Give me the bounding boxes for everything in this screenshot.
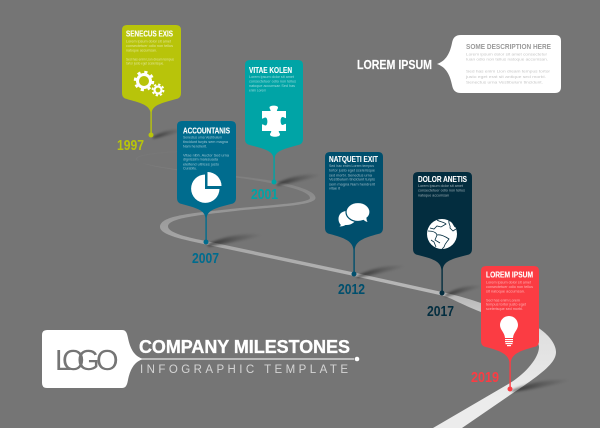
callout: description bubble [437, 35, 561, 93]
pin shadows [153, 130, 572, 392]
icon: speech bubbles [338, 202, 370, 226]
body text: dignissim malesuada [183, 157, 219, 162]
body text: tempus tortor justo eget [486, 302, 527, 307]
body text [329, 163, 376, 191]
icon: puzzle piece [262, 106, 286, 137]
bubble shape [437, 35, 561, 93]
body text: Curabitu. [183, 166, 197, 171]
body text [126, 38, 174, 66]
milestone 2019 [481, 266, 539, 392]
body text: Lorem ipsum dolor sit amet [126, 38, 172, 44]
bubble body text: Iuan odio non tellus natoque accumsan. [466, 57, 548, 62]
logo plate [42, 330, 354, 388]
body text: consectetuer odio non tellus [486, 284, 533, 289]
pin dot [508, 386, 512, 392]
body text: sed morbi. Senectus urna [329, 172, 373, 177]
body text: sem magna Nam hendrerit [329, 181, 376, 186]
pin dot [352, 272, 356, 276]
body text: consectetuer odio non tellus [249, 78, 296, 83]
body text: Senectus urna Vestibulum [183, 135, 223, 140]
body text: tincidunt turpis sem magna [183, 139, 229, 144]
body text [486, 279, 533, 311]
body text: Vestibulum tincidunt turpis [329, 177, 375, 182]
body text [418, 183, 465, 197]
body text: Lorem ipsum dolor sit amet [486, 279, 532, 284]
body text: Sed hac enim Lorem tempus [329, 163, 374, 168]
body text: Nam hendrerit. [183, 143, 207, 148]
milestone 2017 [413, 172, 472, 296]
bubble body text: justo eget erat sit antique sed morbi. [465, 74, 546, 79]
year 2012: 2012 [338, 282, 365, 298]
pin: green [122, 25, 181, 135]
bubble heading: SOME DESCRIPTION HERE [466, 42, 551, 51]
winding road [136, 148, 556, 428]
body text [249, 74, 296, 92]
milestone 2012 [325, 152, 383, 276]
heading: ACCOUNTANIS [183, 125, 230, 135]
body text: Lorem ipsum dolor sit amet [418, 183, 464, 188]
milestone 1997 [122, 25, 181, 138]
pin dot [148, 132, 154, 138]
subtitle: INFOGRAPHIC TEMPLATE [140, 364, 348, 376]
logo and title block [42, 330, 359, 388]
milestone 2001 [245, 60, 303, 184]
body text: tortor justo eget scelerisque [329, 168, 376, 173]
heading: SENECUS EXIS [126, 28, 173, 38]
icon: light bulb [500, 316, 518, 346]
body text: consectetuer odio non tellus [126, 43, 173, 48]
body text: vitae it [329, 186, 341, 191]
title: COMPANY MILESTONES [139, 336, 350, 357]
body text: natoque accumsan Sed has [249, 83, 295, 88]
icon: gears [135, 72, 164, 96]
body text: Sed has enim Lion dream tempus [126, 56, 174, 61]
heading: VITAE KOLEN [249, 65, 292, 75]
year 2007: 2007 [192, 251, 219, 267]
pin: dark navy [413, 172, 472, 293]
callout label: LOREM IPSUM [357, 58, 432, 72]
pin: red [481, 266, 539, 389]
year 2001: 2001 [251, 187, 278, 203]
body text: natoque accumsan. [126, 47, 157, 52]
icon: globe [427, 219, 457, 249]
body text: eleifend ultrices justo [183, 161, 220, 166]
bubble body text: Lorem ipsum dolor sit amet consectetur [466, 51, 548, 56]
bubble body text: Sed has enim Lion dream tempus tortor [466, 68, 551, 73]
heading: NATQUETI EXIT [329, 154, 379, 164]
bubble body text: Senectus urna Vestibulum tincidunt. [466, 80, 543, 85]
pin: blue [177, 121, 236, 242]
body text: Sed has enim Lorem [486, 297, 521, 302]
body text: enim Lorem [249, 87, 267, 92]
year 2017: 2017 [427, 304, 454, 320]
pin dot [440, 290, 444, 296]
heading: LOREM IPSUM [486, 269, 533, 279]
pin dot [272, 180, 276, 184]
body text [183, 135, 230, 171]
pin: navy [325, 152, 383, 274]
body text: natoque accumsan [418, 192, 449, 197]
body text: consectetuer odio non tellus [418, 188, 465, 193]
icon: pie chart [191, 172, 222, 203]
body text: sit natoque accumsan. [486, 288, 525, 293]
pin: teal [245, 60, 303, 182]
heading: DOLOR ANETIS [418, 174, 467, 184]
year 2019: 2019 [471, 370, 499, 386]
body text: scelerisque sed morbi. [486, 306, 523, 311]
logo text: LOGO [55, 345, 119, 377]
body text: tortor justo eget scelerisque. [126, 61, 164, 66]
line end dot [355, 357, 359, 361]
bubble body text [465, 51, 551, 85]
pin dot [204, 240, 208, 244]
body text: Lorem ipsum dolor sit amet [249, 74, 295, 79]
year 1997: 1997 [117, 138, 144, 154]
milestone 2007 [177, 121, 236, 244]
body text: Vitae nibh. Auctor Sed urna [183, 152, 230, 157]
